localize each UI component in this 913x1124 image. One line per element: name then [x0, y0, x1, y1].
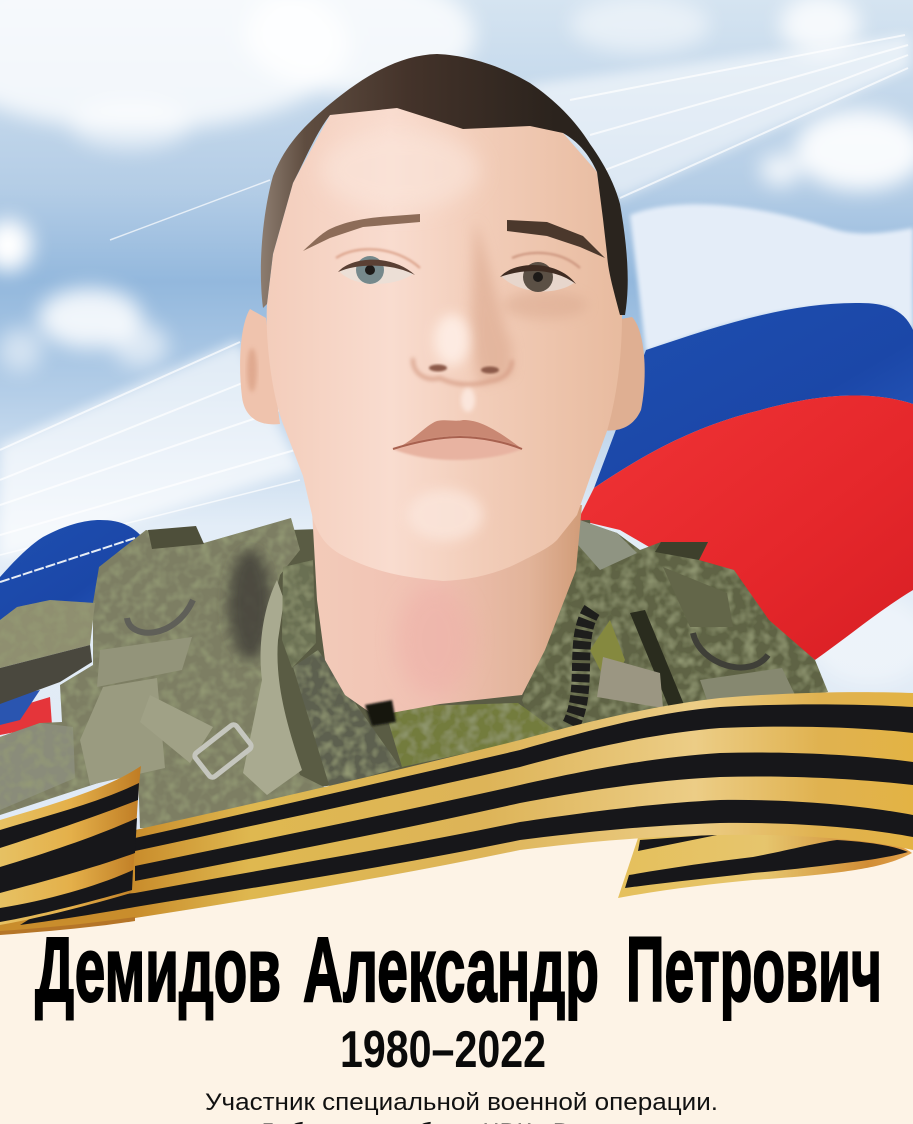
ribbon: lower right fold [618, 832, 912, 898]
collar shadow [365, 700, 396, 726]
neck [312, 505, 582, 716]
mouth [393, 420, 522, 460]
flag: left side [0, 520, 150, 735]
arm sleeve [0, 600, 95, 668]
light streaks, left [0, 340, 300, 560]
eyes [336, 249, 580, 292]
soldier portrait [0, 54, 828, 828]
name heading [35, 919, 882, 1021]
collar [282, 560, 316, 668]
D-rings and buckle [127, 600, 768, 779]
forehead highlight [320, 130, 480, 210]
ribbon: left tail [0, 766, 141, 925]
tactical vest, left [0, 518, 400, 828]
ears [240, 309, 645, 431]
name heading: Демидов [35, 919, 281, 1021]
shoulder pad shadow [228, 550, 272, 660]
arm dark strap [0, 645, 92, 704]
long pale strap [243, 580, 302, 795]
hair [261, 54, 628, 315]
eyebrows [303, 214, 605, 258]
tactical vest backing behind neck [258, 520, 600, 790]
description text: Участник специальной военной операции. [205, 1089, 718, 1116]
chest tab [97, 637, 192, 687]
lower pouch [0, 723, 75, 810]
cream lower panel [0, 834, 913, 1124]
green T-shirt [384, 703, 559, 767]
radio cord [570, 610, 592, 727]
light streaks, right [525, 35, 910, 200]
flag: right side waving [578, 204, 913, 660]
name heading: Александр [303, 919, 599, 1021]
vertical strap [80, 678, 165, 785]
chin highlight [407, 489, 483, 541]
top tab [148, 526, 204, 549]
eye socket and right cheek shading [503, 291, 587, 319]
neck pink patch [397, 585, 473, 695]
face [267, 104, 622, 581]
ribbon: main band [0, 692, 913, 935]
nose [413, 220, 512, 412]
St George ribbon [0, 692, 913, 935]
beige radio pouch tab [597, 657, 663, 708]
tactical vest, right [522, 520, 828, 750]
dark lapel [293, 650, 400, 788]
diagonal strap [140, 695, 213, 763]
years of life: 1980–2022 [340, 1021, 546, 1079]
